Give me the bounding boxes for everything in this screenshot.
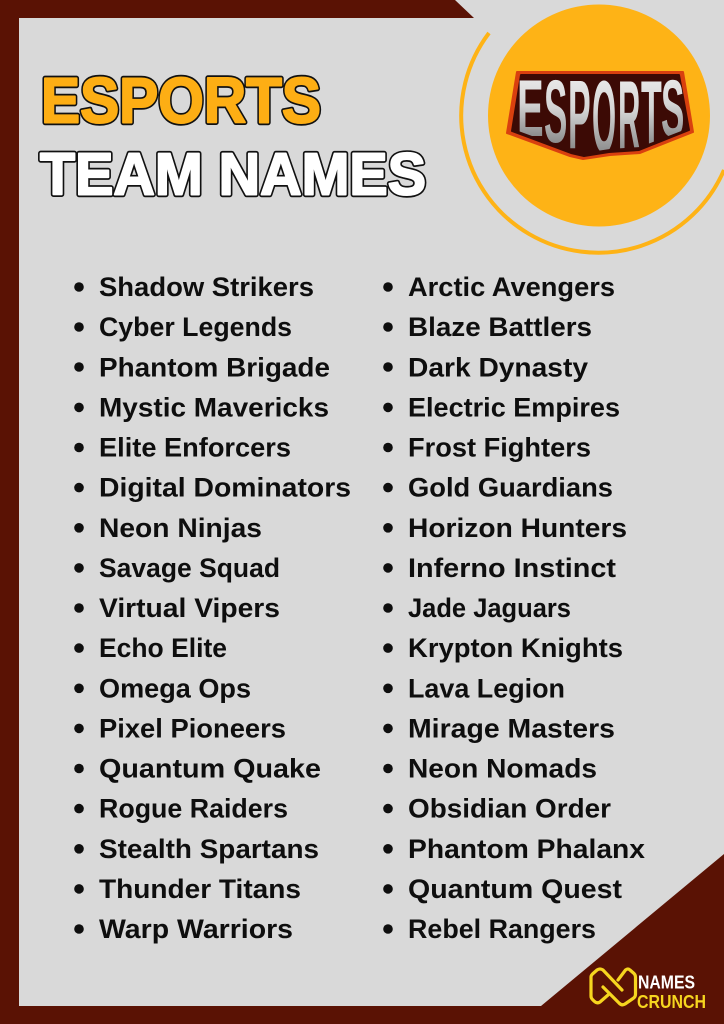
title: TEAM NAMES: TEAM NAMES [40, 142, 426, 208]
item: Inferno Instinct [408, 553, 616, 583]
item: Frost Fighters [408, 432, 591, 462]
item: Pixel Pioneers [99, 713, 286, 743]
title: TEAM NAMES: TEAM NAMES [40, 142, 426, 208]
item: Horizon Hunters [408, 513, 627, 543]
esports logo: P [568, 61, 591, 169]
esports logo: T [641, 61, 662, 166]
esports logo: R [618, 61, 640, 172]
dark frame: bottom border with corner [0, 854, 724, 1024]
item: Krypton Knights [408, 633, 623, 663]
yellow circle badge [488, 4, 710, 226]
yellow ring arc [461, 33, 724, 253]
item: Blaze Battlers [408, 312, 592, 342]
item: Mystic Mavericks [99, 392, 329, 422]
item: Dark Dynasty [408, 352, 588, 382]
item: Digital Dominators [99, 473, 351, 503]
item: Phantom Phalanx [408, 834, 645, 864]
item: Phantom Brigade [99, 352, 330, 382]
item: Quantum Quake [99, 754, 321, 784]
item: Gold Guardians [408, 473, 613, 503]
item: Neon Nomads [408, 754, 597, 784]
esports logo: S [544, 63, 567, 162]
item: Echo Elite [99, 633, 227, 663]
item: Cyber Legends [99, 312, 292, 342]
title: ESPORTS: ESPORTS [41, 64, 321, 136]
esports logo: E [517, 62, 544, 154]
brand name: CRUNCH [637, 992, 706, 1012]
item: Virtual Vipers [99, 593, 280, 623]
item: Lava Legion [408, 673, 565, 703]
item: Obsidian Order [408, 794, 612, 824]
brand logo: Names Crunch [591, 969, 706, 1012]
item: Jade Jaguars [408, 593, 571, 623]
item: Stealth Spartans [99, 834, 319, 864]
item: Omega Ops [99, 673, 251, 703]
item: Savage Squad [99, 553, 280, 583]
brand name: NAMES [638, 972, 695, 992]
dark frame: top and left border [0, 0, 474, 1024]
item: Electric Empires [408, 392, 620, 422]
item: Mirage Masters [408, 713, 615, 743]
esports logo: S [661, 65, 684, 154]
item: Shadow Strikers [99, 272, 314, 302]
list column 2 [383, 272, 645, 944]
item: Arctic Avengers [408, 272, 615, 302]
item: Rebel Rangers [408, 914, 596, 944]
esports logo: O [592, 60, 616, 174]
list column 1 [74, 272, 351, 944]
item: Elite Enforcers [99, 432, 291, 462]
item: Neon Ninjas [99, 513, 262, 543]
brand name [637, 972, 706, 1012]
item: Quantum Quest [408, 874, 622, 904]
icon: N mark [591, 969, 636, 1005]
item: Rogue Raiders [99, 794, 288, 824]
esports logo [506, 71, 694, 160]
title: ESPORTS: ESPORTS [41, 64, 321, 136]
item: Thunder Titans [99, 874, 301, 904]
item: Warp Warriors [99, 914, 293, 944]
